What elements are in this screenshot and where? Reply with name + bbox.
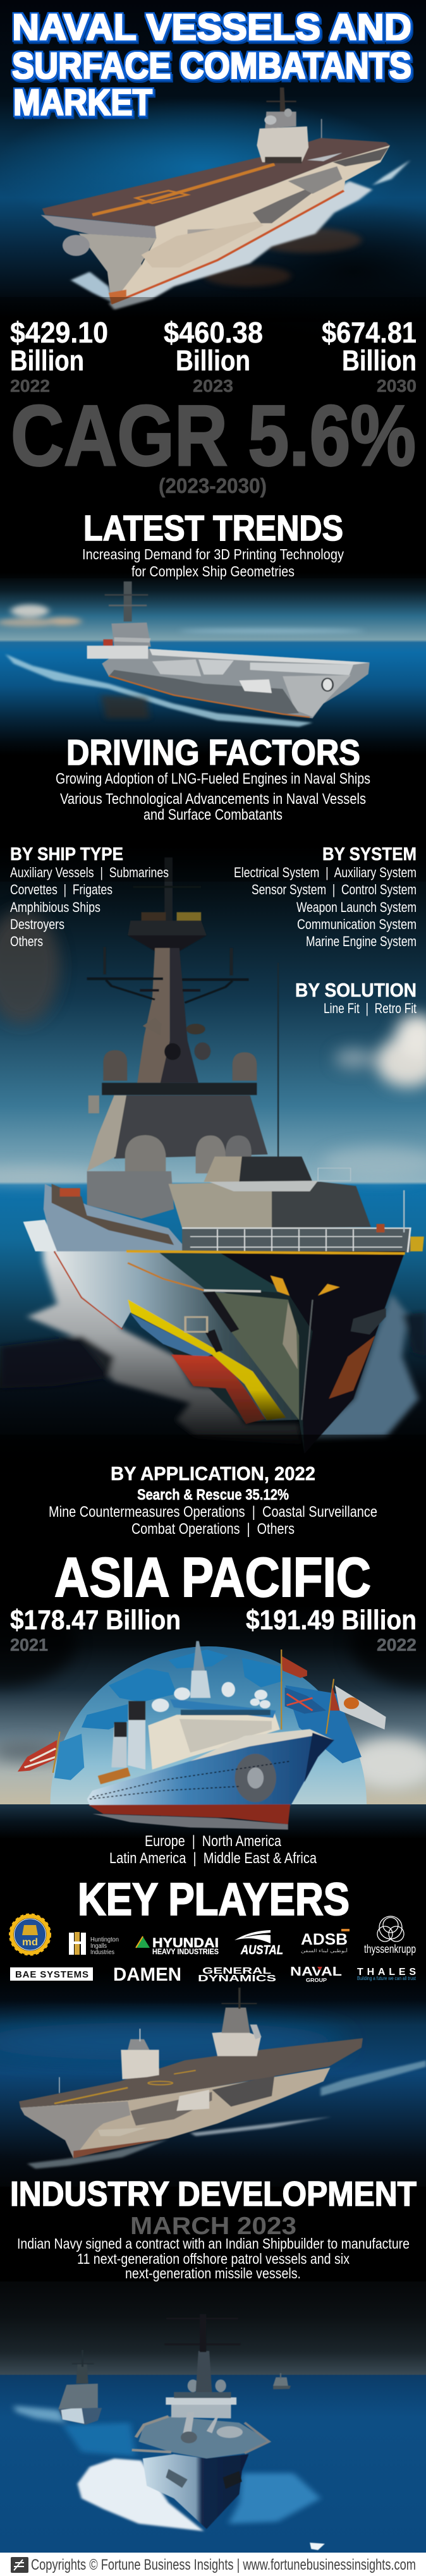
panel: segment by application	[49, 1462, 377, 1538]
logo: Naval Group: GROUP	[306, 1978, 327, 1983]
heading: by solution: BY SOLUTION	[295, 979, 417, 1001]
logo: Huntington Ingalls Industries: Huntington	[90, 1936, 119, 1943]
list: ship types: Destroyers	[10, 916, 64, 932]
title: MARKET	[13, 82, 152, 123]
heading: driving factors: DRIVING FACTORS	[66, 732, 360, 773]
logo: General Dynamics	[198, 1965, 276, 1984]
list: other regions	[109, 1833, 317, 1867]
panel: fleet scene	[0, 2281, 426, 2576]
logo: Mazagon Dock	[10, 1914, 51, 1955]
logo: ADSB: ADSB	[301, 1931, 348, 1948]
CAGR period: (2023-2030)	[159, 474, 267, 497]
heading: by application: BY APPLICATION, 2022	[111, 1462, 315, 1485]
list: other regions: Europe | North America	[145, 1833, 282, 1850]
panel: segment by ship type	[10, 844, 169, 949]
stat 2023	[164, 316, 263, 396]
illustration: destroyer superstructure	[23, 858, 424, 1253]
stat 2022	[246, 1605, 417, 1655]
text: driving factors list	[56, 770, 370, 823]
text: development description: 11 next-generation offshore patrol vessels and six	[77, 2251, 350, 2267]
stat 2021: 2021	[10, 1635, 48, 1655]
text: driving factors list: and Surface Combatants	[143, 806, 283, 823]
heading: date: MARCH 2023	[130, 2213, 296, 2240]
heading: latest trends: LATEST TRENDS	[83, 508, 343, 549]
illustration: globe	[51, 1646, 367, 1804]
logo: Naval Group: NAVAL	[290, 1965, 342, 1979]
stat 2023: $460.38	[164, 316, 263, 349]
illustration: carrier with escort	[19, 1988, 426, 2169]
heading: asia pacific: ASIA PACIFIC	[54, 1546, 371, 1608]
list: ship types: Amphibious Ships	[10, 899, 100, 915]
illustration: carrier side view	[0, 581, 370, 727]
panel: industry development	[10, 2174, 417, 2281]
list: applications	[49, 1504, 377, 1538]
logo: ADSB	[301, 1929, 350, 1953]
logo: ADSB: أبوظبي لبناء السفن	[301, 1948, 348, 1953]
stat 2021: $178.47 Billion	[10, 1605, 181, 1636]
logo: Naval Group	[290, 1965, 342, 1983]
logo: General Dynamics: DYNAMICS	[198, 1973, 276, 1984]
stat 2023: Billion	[176, 344, 250, 377]
text: driving factors list: Various Technological Advancements in Naval Vessels	[60, 791, 366, 808]
panel: market size stats	[10, 316, 417, 497]
logo: Huntington Ingalls Industries	[69, 1932, 119, 1956]
text: development description: next-generation missile vessels.	[125, 2265, 301, 2281]
panel: asia pacific scene	[0, 1546, 426, 1839]
logo: Mazagon Dock: md	[22, 1937, 38, 1948]
stat 2022	[10, 316, 108, 396]
stat 2030: 2030	[377, 376, 417, 396]
title: NAVAL VESSELS AND	[12, 7, 411, 48]
illustration: sea foam and swell	[0, 1224, 426, 1444]
logo: Hyundai Heavy Industries	[136, 1936, 219, 1956]
logo: Huntington Ingalls Industries: Ingalls	[90, 1943, 107, 1950]
heading: by system: BY SYSTEM	[322, 844, 417, 865]
illustration: fleet of warships	[14, 2314, 325, 2550]
panel: carrier scene	[0, 1972, 426, 2187]
illustration: destroyer bow hull	[54, 1251, 405, 1454]
heading: by ship type: BY SHIP TYPE	[10, 844, 123, 865]
stat 2030	[322, 316, 417, 396]
footer bar	[0, 2553, 426, 2576]
stat 2022: 2022	[377, 1635, 417, 1655]
panel: segment by system	[234, 844, 417, 949]
text: development description	[17, 2235, 410, 2281]
logo: Hyundai Heavy Industries: HYUNDAI	[152, 1936, 219, 1950]
title	[12, 7, 411, 123]
logo: Austal: AUSTAL	[240, 1943, 283, 1957]
illustration: clouds	[0, 910, 426, 1183]
stat 2022: Billion	[10, 344, 84, 377]
list: other regions: Latin America | Middle East & Africa	[109, 1850, 317, 1867]
stat 2023: 2023	[193, 376, 233, 396]
illustration: aircraft carrier	[40, 87, 410, 310]
panel: warship scene	[0, 847, 426, 1479]
panel: segment by solution	[295, 979, 417, 1016]
logo: Damen: DAMEN	[113, 1964, 181, 1985]
list: applications: Combat Operations | Others	[131, 1521, 295, 1538]
logo: Thales: THALES	[357, 1967, 416, 1978]
stat 2021	[10, 1605, 181, 1655]
list: systems	[234, 865, 417, 949]
list: ship types: Others	[10, 933, 43, 949]
logo: Austal	[234, 1930, 283, 1957]
panel: hero	[0, 0, 426, 341]
logo: Huntington Ingalls Industries: Industries	[90, 1949, 114, 1956]
panel: key player logos	[10, 1914, 417, 1985]
illustration: cruise-style ship	[87, 1641, 334, 1830]
logo: Fortune Business Insights	[11, 2557, 28, 2573]
text: trend description	[82, 546, 344, 580]
illustration: flags	[18, 1649, 386, 1773]
stat 2022: 2022	[10, 376, 50, 396]
logo: Hyundai Heavy Industries: HEAVY INDUSTRIES	[152, 1948, 219, 1956]
logo: General Dynamics: GENERAL	[202, 1965, 271, 1976]
stat 2030: $674.81	[322, 316, 417, 349]
logo: thyssenkrupp	[364, 1916, 416, 1955]
heading: key players: KEY PLAYERS	[78, 1874, 350, 1925]
text: trend description: for Complex Ship Geometries	[131, 563, 295, 580]
logo: BAE Systems: BAE SYSTEMS	[15, 1969, 88, 1980]
list: ship types: Corvettes | Frigates	[10, 882, 113, 897]
leading application share: Search & Rescue 35.12%	[137, 1486, 289, 1504]
stat 2022: $429.10	[10, 316, 108, 349]
list: ship types: Auxiliary Vessels | Submarines	[10, 865, 169, 880]
text: trend description: Increasing Demand for 3D Printing Technology	[82, 546, 344, 562]
panel: latest trends scene	[0, 572, 426, 755]
list: ship types	[10, 865, 169, 949]
